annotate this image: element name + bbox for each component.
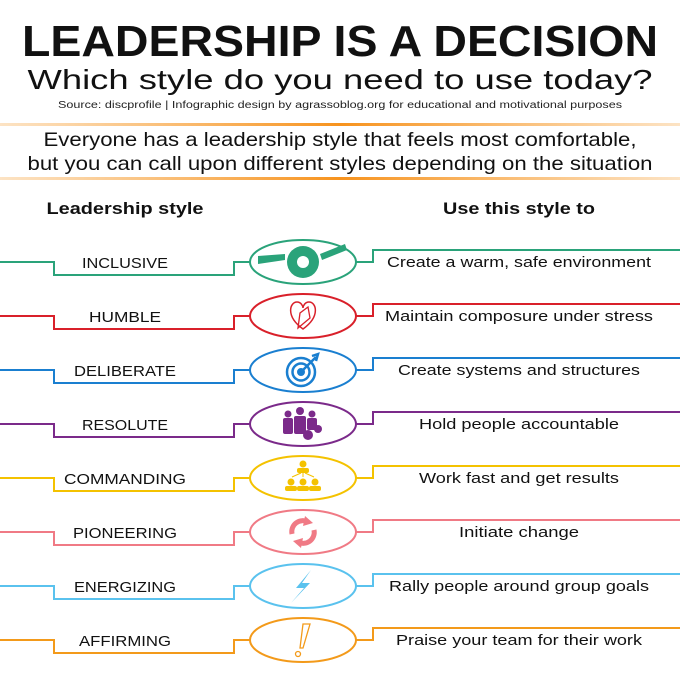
- row: deliberate: [0, 348, 680, 392]
- row: affirming: [0, 618, 680, 662]
- row: energizing: Rally people around group goals: [389, 578, 649, 595]
- row: commanding: Work fast and get results: [419, 470, 619, 487]
- row: affirming: Praise your team for their work: [396, 632, 643, 649]
- row: commanding: COMMANDING: [64, 471, 186, 488]
- row: pioneering: PIONEERING: [73, 525, 177, 542]
- row: inclusive: INCLUSIVE: [82, 255, 168, 272]
- row: resolute: [0, 402, 680, 446]
- row: humble: HUMBLE: [89, 309, 161, 326]
- row: inclusive: Create a warm, safe environment: [387, 254, 652, 271]
- header: leadership style: Leadership style: [46, 199, 204, 218]
- row: deliberate: Create systems and structures: [398, 362, 640, 379]
- row: pioneering: Initiate change: [459, 524, 579, 541]
- intro text: [28, 129, 652, 175]
- row: pioneering: [0, 510, 680, 554]
- subtitle: Which style do you need to use today?: [28, 64, 652, 95]
- intro text: Everyone has a leadership style that feels most comfortable,: [44, 129, 636, 151]
- row: humble: Maintain composure under stress: [385, 308, 653, 325]
- row: resolute: RESOLUTE: [82, 417, 168, 434]
- title: LEADERSHIP IS A DECISION: [22, 17, 658, 66]
- header: use this style to: Use this style to: [443, 199, 595, 218]
- row: inclusive: [0, 240, 680, 284]
- source line: Source: discprofile | Infographic design by agrassoblog.org for educational and motivational purposes: [58, 100, 622, 111]
- row: resolute: Hold people accountable: [419, 416, 619, 433]
- intro text: but you can call upon different styles depending on the situation: [28, 153, 652, 175]
- row: energizing: ENERGIZING: [74, 579, 176, 596]
- row: affirming: AFFIRMING: [79, 633, 171, 650]
- row: humble: [0, 294, 680, 338]
- row: energizing: [0, 564, 680, 608]
- row: deliberate: DELIBERATE: [74, 363, 176, 380]
- row: commanding: [0, 456, 680, 500]
